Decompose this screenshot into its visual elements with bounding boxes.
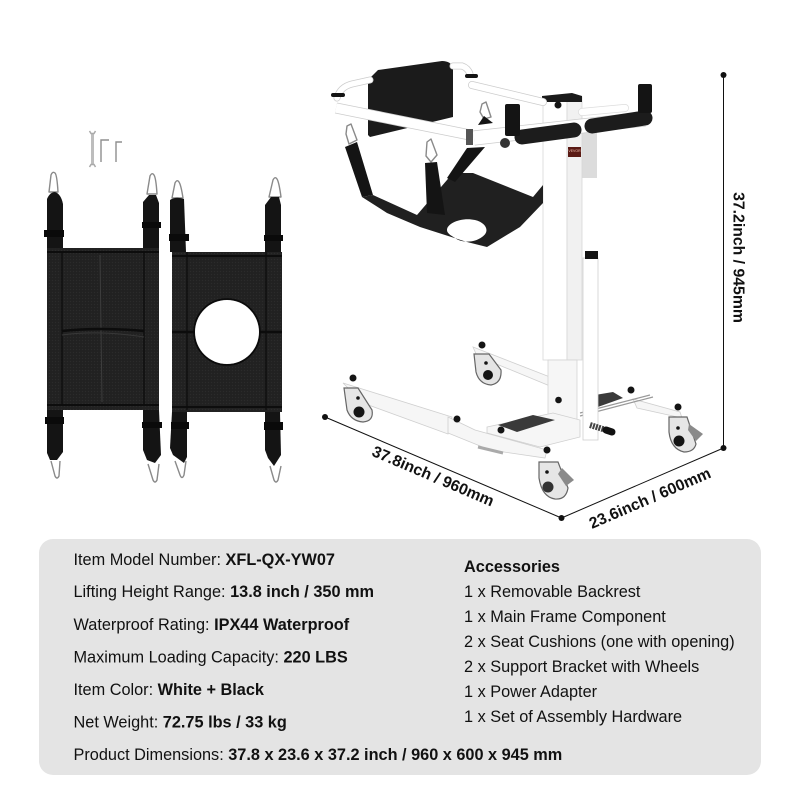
fabric panel [47, 248, 159, 410]
spring [590, 425, 612, 432]
straps [345, 116, 493, 215]
column bolt [554, 102, 562, 108]
text block: accessories: 2 x Support Bracket with Wheels [464, 658, 699, 676]
front caster with brake [539, 446, 574, 499]
text block: product specs: Item Model Number: XFL-QX-YW07 [74, 551, 335, 569]
side bracket [582, 122, 597, 178]
slider bracket [478, 447, 503, 453]
text block: accessories: 2 x Seat Cushions (one with opening) [464, 633, 735, 651]
main column [543, 97, 582, 426]
upright hand grips [505, 84, 652, 136]
text block: accessories: 1 x Removable Backrest [464, 583, 641, 601]
dimension: length [322, 414, 562, 518]
dimension: width [558, 445, 726, 533]
text block: product specs: Waterproof Rating: IPX44 Waterproof [74, 616, 350, 634]
crossbar and grips [474, 118, 645, 138]
side bands and folds [172, 252, 282, 410]
rear footplate [595, 392, 623, 408]
seat cushion: solid sling [44, 172, 162, 482]
base knobs [454, 386, 634, 434]
text block: accessories: 1 x Set of Assembly Hardware [464, 708, 682, 726]
frame caps [331, 74, 478, 97]
dimension: height: 37.2inch / 945mm [730, 192, 746, 323]
text block: product specs: Item Color: White + Black [74, 681, 265, 699]
carabiners [172, 178, 281, 482]
transfer lift [331, 61, 703, 499]
brand label: VEVOR [568, 149, 581, 153]
front frame rail [336, 108, 473, 145]
text block: product specs [74, 551, 562, 764]
text block: accessories [464, 558, 735, 726]
dimension: length: 37.8inch / 960mm [369, 443, 496, 510]
base platform [487, 413, 580, 447]
text block: accessories: 1 x Power Adapter [464, 683, 598, 701]
straps [170, 197, 281, 466]
front left base leg [343, 383, 452, 434]
column cap [542, 93, 582, 102]
rear frame rail [337, 66, 625, 112]
rear left caster [474, 342, 501, 385]
pump handle [583, 251, 598, 440]
backrest [368, 61, 453, 137]
seat hanging sling [345, 102, 543, 247]
dimension: height [720, 72, 746, 448]
text block: product specs: Product Dimensions: 37.8 x 23.6 x 37.2 inch / 960 x 600 x 945 mm [74, 746, 562, 764]
panel: specifications [39, 539, 761, 775]
rear base leg [473, 347, 550, 386]
sling fabric [362, 173, 543, 247]
seat cushion: sling with opening [169, 178, 283, 482]
brand label [568, 147, 581, 157]
dimension: width: 23.6inch / 600mm [587, 465, 714, 533]
fabric panel with circular opening [172, 252, 282, 412]
front footplate [498, 415, 555, 432]
side bands and folds [47, 252, 159, 405]
rear right base arm [580, 395, 682, 418]
text block: accessories: Accessories [464, 558, 560, 576]
text block: product specs: Lifting Height Range: 13.8 inch / 350 mm [74, 583, 374, 601]
straps [47, 192, 161, 463]
hooks [346, 102, 491, 162]
right caster with brake [669, 404, 703, 452]
icon: assembly tools [90, 131, 122, 167]
front left caster [344, 374, 372, 422]
carabiners [49, 172, 159, 482]
buckles [44, 222, 162, 428]
connecting plate [448, 417, 547, 458]
buckles [169, 234, 283, 430]
crossbar end bolt [500, 138, 510, 148]
text block: product specs: Net Weight: 72.75 lbs / 33 kg [74, 714, 287, 732]
text block: product specs: Maximum Loading Capacity: 220 LBS [74, 648, 348, 666]
text block: accessories: 1 x Main Frame Component [464, 608, 666, 626]
